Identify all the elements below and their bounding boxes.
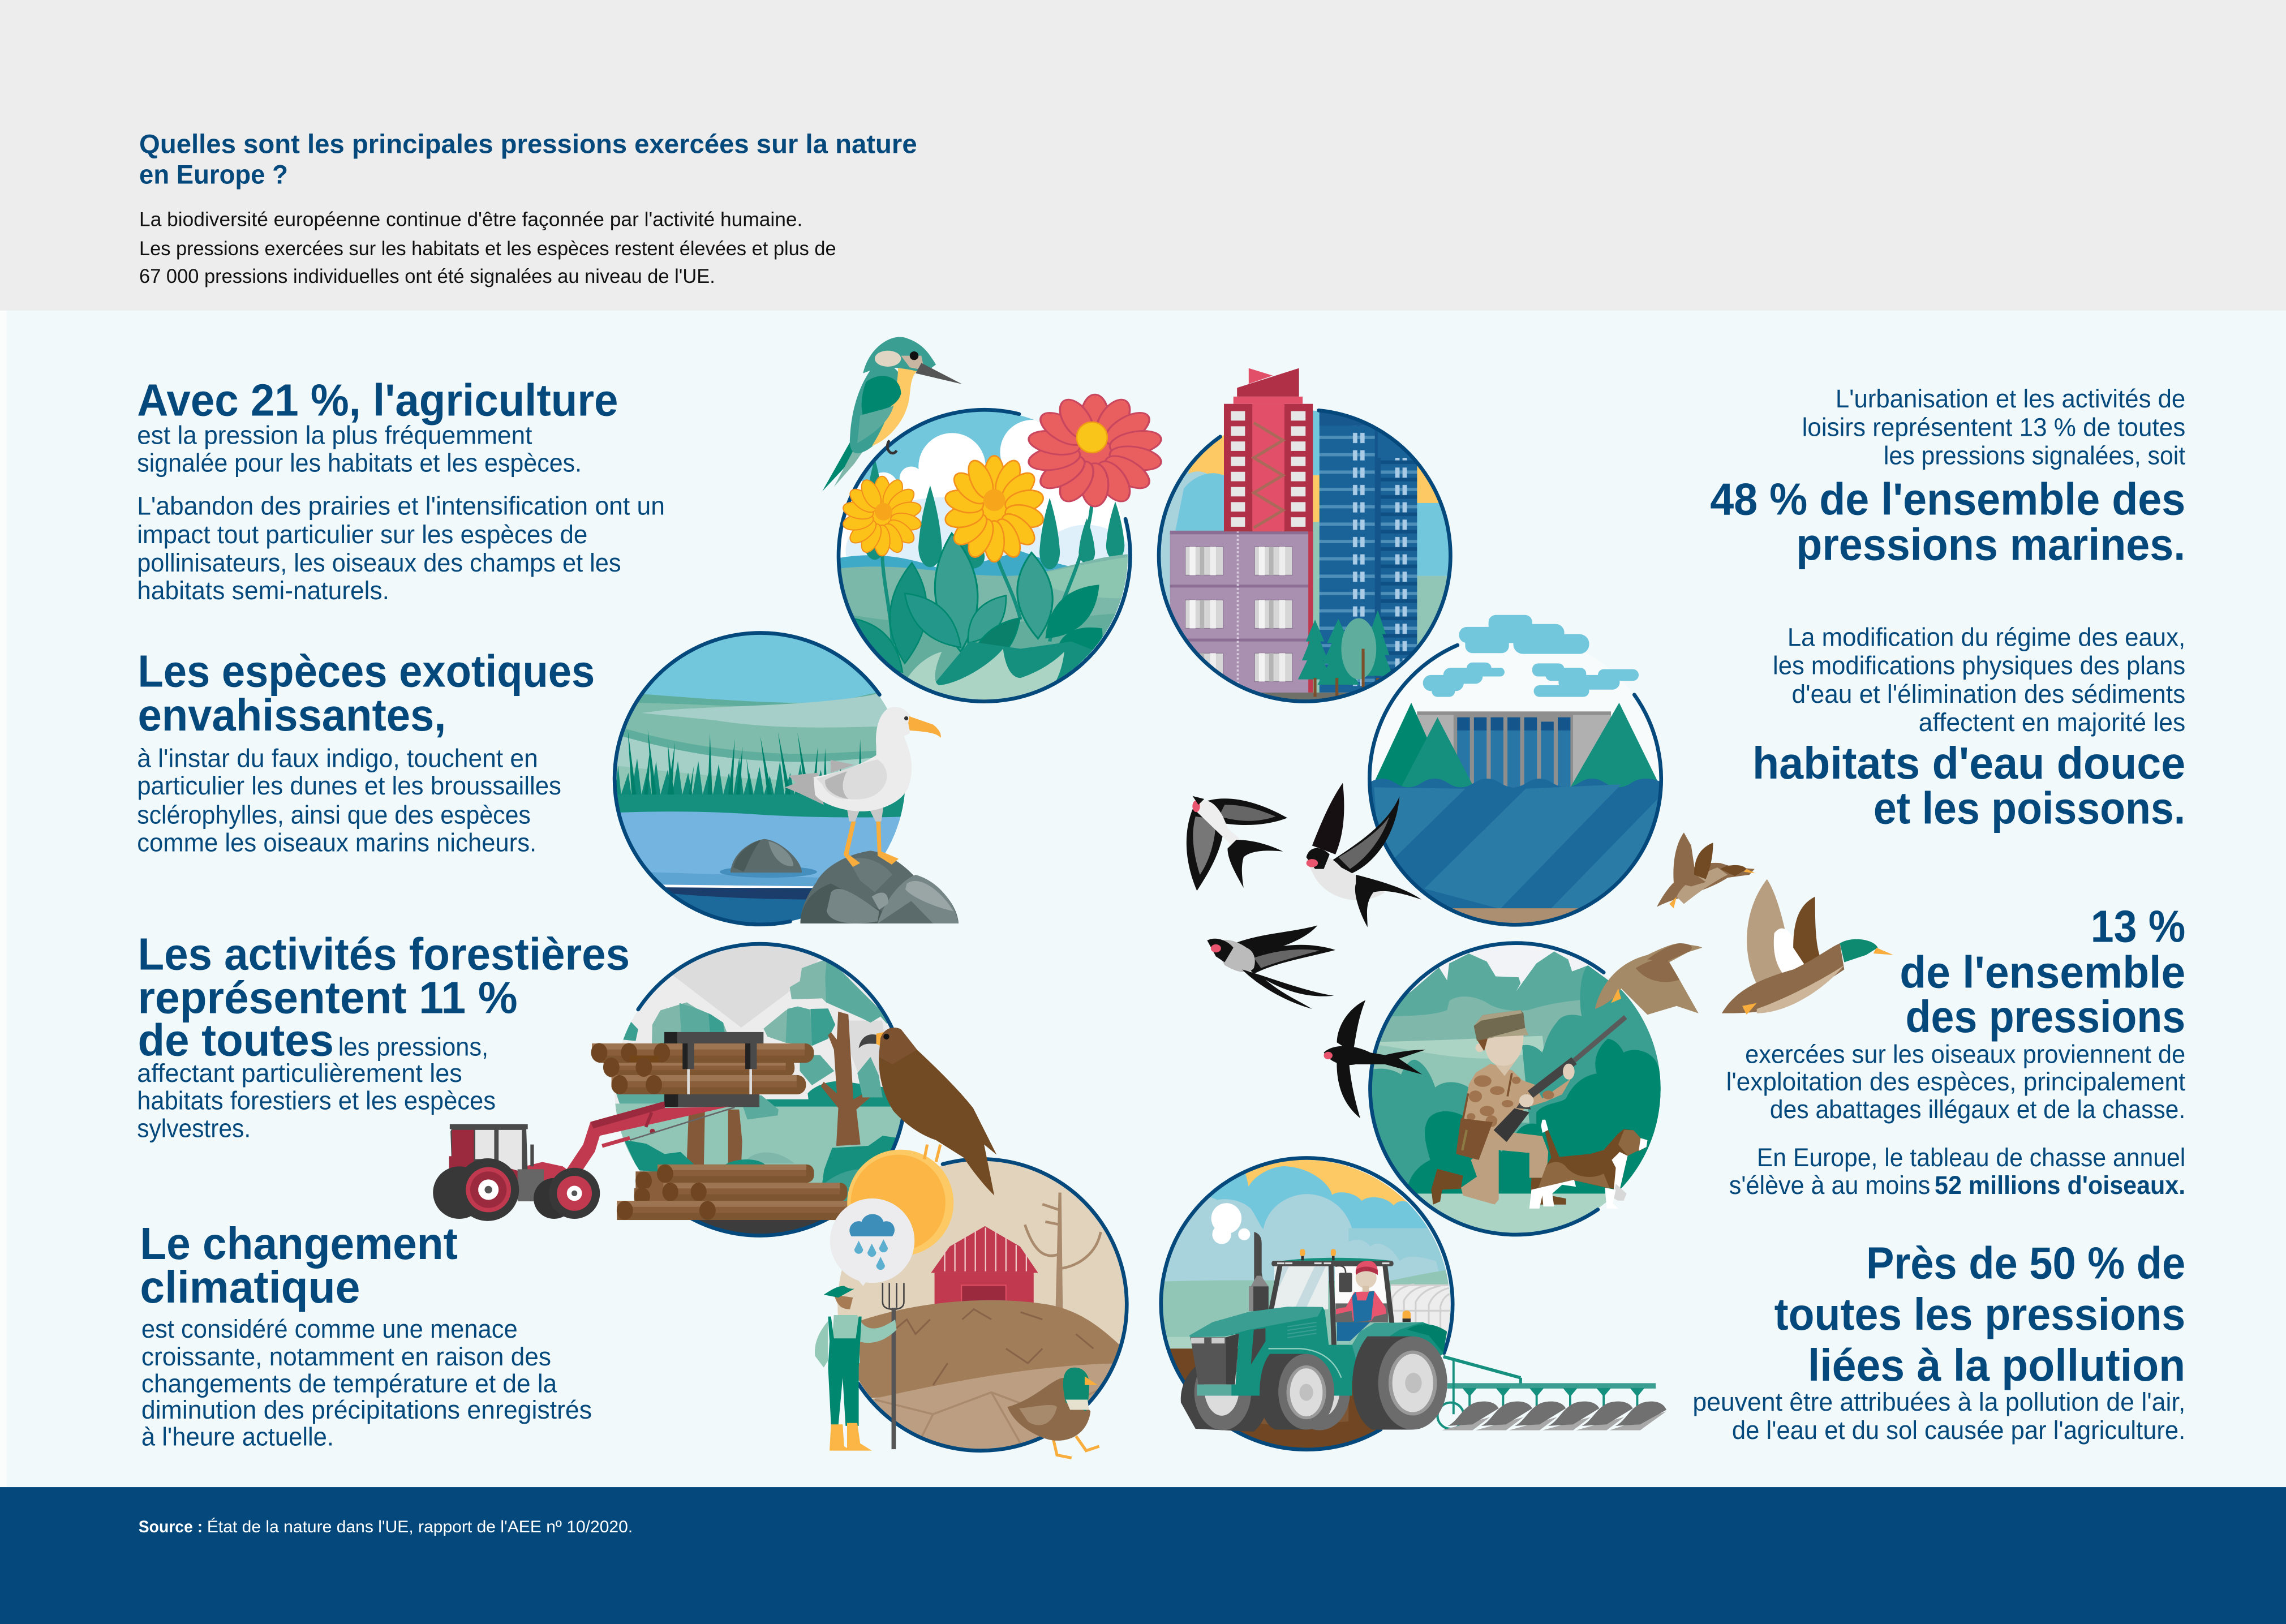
text block: pollution: toutes les pressions — [1774, 1289, 2185, 1339]
panel: drought barn illustration — [815, 1150, 1131, 1458]
text block: changement climatique: changements de température et de la — [141, 1369, 557, 1398]
text block: eaux douces: les modifications physiques des plans — [1773, 651, 2185, 680]
text block: changement climatique — [140, 1218, 592, 1451]
text block: oiseaux: En Europe, le tableau de chasse annuel — [1757, 1143, 2185, 1172]
left margin strip — [0, 311, 7, 1487]
text block: changement climatique: Le changement — [140, 1218, 458, 1269]
intro text — [139, 209, 836, 287]
text block: changement climatique: croissante, notamment en raison des — [141, 1342, 551, 1371]
text block: pollution: Près de 50 % de — [1866, 1238, 2185, 1288]
text block: oiseaux — [1726, 901, 2186, 1200]
text block: pollution: peuvent être attribuées à la pollution de l'air, — [1692, 1387, 2185, 1416]
text block: changement climatique: diminution des précipitations enregistrés — [141, 1395, 592, 1424]
text block: agriculture: L'abandon des prairies et l'intensification ont un — [137, 492, 665, 521]
text block: espèces exotiques: comme les oiseaux marins nicheurs. — [137, 828, 536, 857]
text block: urbanisation: pressions marines. — [1796, 519, 2185, 569]
icon: mallard walking — [1007, 1368, 1099, 1458]
text block: oiseaux: 13 % — [2091, 901, 2185, 951]
text block: agriculture: signalée pour les habitats et les espèces. — [137, 449, 582, 478]
icon: flying duck 1 — [1657, 832, 1755, 908]
icon: yellow flower large — [943, 456, 1045, 562]
text block: pollution: liées à la pollution — [1808, 1340, 2185, 1390]
panel: flowers illustration — [822, 337, 1164, 715]
ring: flowers — [839, 410, 1130, 702]
text block: espèces exotiques: Les espèces exotiques — [137, 646, 595, 697]
title: en Europe ? — [139, 160, 288, 190]
icon: hunter — [1431, 1010, 1626, 1205]
text block: eaux douces: habitats d'eau douce — [1752, 738, 2185, 788]
icon: log piles — [591, 1032, 850, 1220]
ring: hunter — [1370, 943, 1604, 1235]
text block: activités forestières — [137, 929, 630, 1143]
text block: espèces exotiques: sclérophylles, ainsi que des espèces — [137, 801, 531, 830]
intro text: 67 000 pressions individuelles ont été signalées au niveau de l'UE. — [139, 266, 715, 287]
panel: hunter illustration — [1369, 943, 1664, 1240]
text block: changement climatique: climatique — [140, 1262, 360, 1312]
text block: urbanisation: L'urbanisation et les activités de — [1836, 384, 2185, 413]
text block: urbanisation: loisirs représentent 13 % de toutes — [1802, 413, 2185, 441]
ring: barn — [858, 1159, 1127, 1451]
text block: oiseaux: de l'ensemble — [1900, 947, 2185, 998]
panel: city illustration — [1159, 368, 1458, 707]
text block: espèces exotiques: envahissantes, — [137, 690, 446, 740]
text block: urbanisation: 48 % de l'ensemble des — [1710, 474, 2185, 525]
icon: sun — [847, 1150, 953, 1256]
text block: activités forestières: affectant particulièrement les — [137, 1059, 462, 1088]
panel: dam illustration — [1369, 615, 1664, 933]
text block: oiseaux: l'exploitation des espèces, principalement — [1726, 1067, 2186, 1096]
icon: kingfisher — [822, 337, 962, 491]
icon: clouds above dam — [1423, 615, 1639, 697]
text block: changement climatique: est considéré comme une menace — [141, 1314, 518, 1343]
title: Quelles sont les principales pressions exercées sur la nature — [139, 130, 917, 160]
text block: eaux douces: d'eau et l'élimination des sédiments — [1792, 680, 2185, 708]
text block: activités forestières: sylvestres. — [137, 1114, 251, 1143]
source text: État de la nature dans l'UE, rapport de l'AEE nº 10/2020. — [207, 1518, 633, 1536]
text block: eaux douces: La modification du régime des eaux, — [1787, 622, 2185, 651]
icon: smoke — [1211, 1203, 1250, 1244]
text block: agriculture: Avec 21 %, l'agriculture — [137, 375, 618, 425]
icon: swallow 4 — [1324, 1000, 1426, 1118]
text block: oiseaux: 52 millions d'oiseaux. — [1935, 1171, 2185, 1200]
text block: oiseaux: exercées sur les oiseaux proviennent de — [1745, 1039, 2185, 1068]
icon: eagle — [859, 1028, 996, 1196]
icon: dog — [1529, 1120, 1647, 1209]
ring: forest — [638, 944, 906, 1235]
ring: dam — [1369, 645, 1661, 925]
text block: agriculture: habitats semi-naturels. — [137, 576, 389, 605]
panel: lake illustration — [612, 633, 959, 931]
icon: swallow 1 — [1187, 796, 1287, 891]
icon: rock in water — [720, 839, 817, 878]
text block: activités forestières: Les activités forestières — [137, 929, 630, 979]
text block: agriculture: pollinisateurs, les oiseaux des champs et les — [137, 548, 621, 577]
text block: urbanisation: les pressions signalées, soit — [1884, 441, 2186, 470]
icon: yellow flower small — [841, 476, 922, 556]
text block: activités forestières: représentent 11 % — [137, 973, 518, 1023]
text block: oiseaux: des pressions — [1906, 991, 2185, 1042]
text block: eaux douces — [1752, 622, 2185, 834]
text block: eaux douces: affectent en majorité les — [1919, 708, 2185, 737]
ring: city — [1159, 410, 1450, 701]
text block: pollution: de l'eau et du sol causée par l'agriculture. — [1732, 1416, 2185, 1445]
text block: eaux douces: et les poissons. — [1874, 783, 2185, 834]
text block: agriculture: impact tout particulier sur les espèces de — [137, 520, 587, 549]
icon: rain bubble — [830, 1198, 914, 1286]
icon: flying mallard — [1722, 879, 1893, 1015]
text block: activités forestières: de toutes — [137, 1015, 334, 1065]
text block: activités forestières: les pressions, — [338, 1032, 488, 1061]
text block: oiseaux: des abattages illégaux et de la chasse. — [1770, 1095, 2185, 1124]
icon: red tower — [1224, 368, 1313, 531]
icon: red tractor with loader — [433, 1101, 735, 1221]
text block: activités forestières: habitats forestiers et les espèces — [137, 1086, 496, 1115]
text block: espèces exotiques — [137, 646, 595, 857]
panel: tractor illustration — [1159, 1158, 1666, 1454]
intro text: La biodiversité européenne continue d'être façonnée par l'activité humaine. — [139, 209, 802, 230]
text block: oiseaux: s'élève à au moins — [1729, 1171, 1930, 1200]
text block: pollution — [1692, 1238, 2185, 1445]
text block: changement climatique: à l'heure actuelle. — [141, 1423, 334, 1451]
icon: red flower — [1026, 394, 1164, 506]
icon: swallow 2 — [1307, 783, 1421, 927]
text block: espèces exotiques: particulier les dunes et les broussailles — [137, 771, 561, 800]
panel: header — [0, 0, 2286, 311]
text block: espèces exotiques: à l'instar du faux indigo, touchent en — [137, 744, 538, 772]
ring: tractor — [1161, 1158, 1453, 1450]
icon: gull on rocks — [785, 707, 959, 923]
text block: agriculture — [137, 375, 665, 605]
icon: swallow 3 — [1207, 925, 1335, 1009]
panel: footer — [0, 1487, 2286, 1624]
title — [139, 130, 917, 190]
icon: green tractor — [1181, 1232, 1447, 1432]
text block: urbanisation — [1710, 384, 2186, 569]
intro text: Les pressions exercées sur les habitats et les espèces restent élevées et plus de — [139, 238, 836, 260]
text block: agriculture: est la pression la plus fréquemment — [137, 421, 532, 450]
icon: plough — [1437, 1356, 1666, 1430]
icon: farmer with pitchfork — [815, 1283, 904, 1451]
icon: flying duck 2 — [1595, 943, 1703, 1015]
panel: forest illustration — [433, 933, 911, 1238]
ring: lake — [615, 633, 879, 925]
source text: Source : — [139, 1518, 203, 1536]
